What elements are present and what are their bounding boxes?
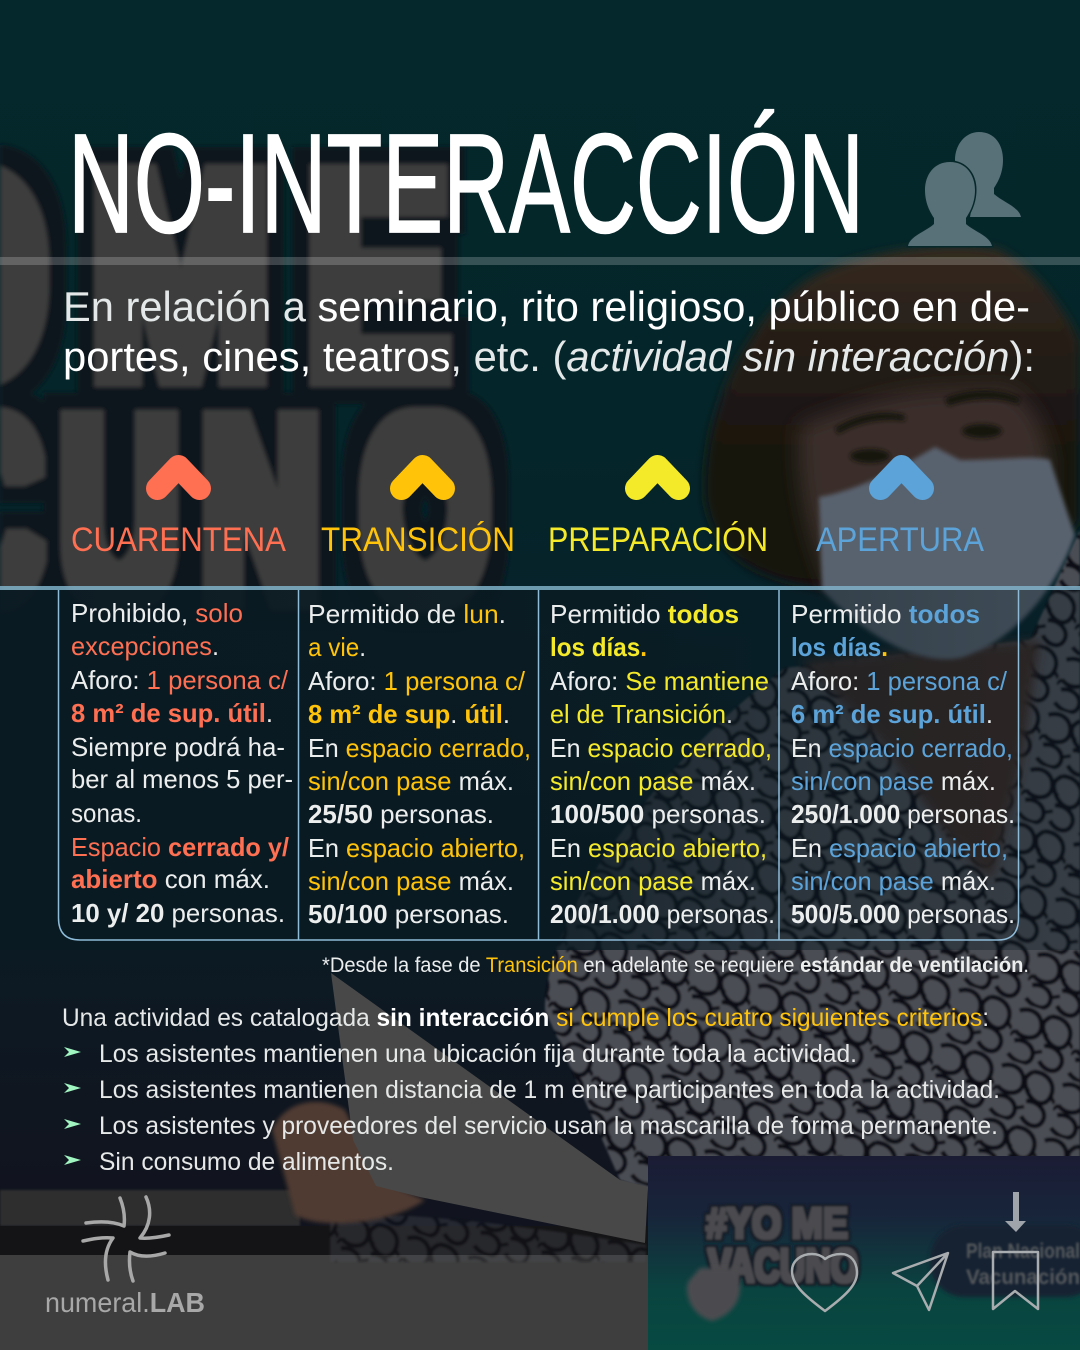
banner lettering: VACUNO bbox=[708, 1240, 858, 1293]
rules text: 6 m² de sup. útil. bbox=[791, 699, 993, 729]
heading: APERTURA bbox=[816, 521, 984, 559]
rules text: excepciones. bbox=[71, 631, 219, 661]
rules text: sin/con pase máx. bbox=[791, 866, 996, 896]
arrow: down bbox=[1005, 1192, 1026, 1232]
rules text bbox=[308, 599, 531, 929]
rules text: Prohibido, solo bbox=[71, 598, 243, 628]
rules text: Aforo: 1 persona c/ bbox=[71, 665, 289, 695]
criteria intro: Una actividad es catalogada sin interacción si cumple los cuatro siguientes criterios: bbox=[62, 1004, 989, 1032]
header rule bbox=[0, 257, 1080, 265]
column: apertura bbox=[791, 466, 1015, 929]
criteria list: Los asistentes mantienen una ubicación fija durante toda la actividad. bbox=[99, 1040, 857, 1068]
logo mark bbox=[83, 1197, 169, 1281]
plan lettering bbox=[966, 1240, 1080, 1289]
rules text: Permitido de lun. bbox=[308, 599, 506, 629]
rules text: 250/1.000 personas. bbox=[791, 799, 1015, 829]
rules text: En espacio cerrado, bbox=[550, 733, 772, 763]
rules text: sin/con pase máx. bbox=[308, 766, 514, 796]
rules text: Permitido todos bbox=[550, 599, 739, 629]
rules text: Aforo: 1 persona c/ bbox=[791, 666, 1008, 696]
heading: PREPARACIÓN bbox=[548, 521, 768, 559]
rules text: En espacio cerrado, bbox=[308, 733, 531, 763]
face mask bbox=[819, 447, 1075, 659]
rules text: 100/500 personas. bbox=[550, 799, 766, 829]
rules text bbox=[550, 599, 775, 929]
rules text: En espacio abierto, bbox=[791, 833, 1008, 863]
icon: send bbox=[893, 1253, 948, 1310]
woman portrait bbox=[545, 246, 1080, 1190]
icon: bookmark bbox=[993, 1252, 1038, 1309]
column: preparación bbox=[548, 466, 775, 929]
rules text: 500/5.000 personas. bbox=[791, 899, 1015, 929]
rules text: ber al menos 5 per- bbox=[71, 764, 293, 794]
rules text: sonas. bbox=[71, 798, 142, 828]
rules text bbox=[791, 599, 1015, 929]
rules text: abierto con máx. bbox=[71, 864, 270, 894]
rules text: En espacio abierto, bbox=[308, 833, 525, 863]
icon: chevron bbox=[158, 466, 200, 488]
plan lettering: Vacunación bbox=[966, 1266, 1080, 1289]
rules text: sin/con pase máx. bbox=[791, 766, 996, 796]
rules text: Espacio cerrado y/ bbox=[71, 832, 289, 862]
eyes bbox=[835, 390, 1020, 463]
rules text: Permitido todos bbox=[791, 599, 980, 629]
table frame bbox=[0, 586, 1080, 940]
bottom scene bbox=[0, 973, 1080, 1350]
rules text: En espacio abierto, bbox=[550, 833, 767, 863]
plan banner blob bbox=[930, 1225, 1080, 1297]
rules text: el de Transición. bbox=[550, 699, 733, 729]
rules text: 25/50 personas. bbox=[308, 799, 494, 829]
rules text: 8 m² de sup. útil. bbox=[308, 699, 510, 729]
icon: heart bbox=[792, 1254, 857, 1311]
subtitle bbox=[63, 283, 1035, 380]
criteria list bbox=[64, 1040, 1000, 1176]
heading: TRANSICIÓN bbox=[321, 521, 515, 559]
banner hand bbox=[687, 1268, 740, 1321]
banner lettering: #YO ME bbox=[706, 1199, 848, 1248]
rules text: En espacio cerrado, bbox=[791, 733, 1013, 763]
rules text: 8 m² de sup. útil. bbox=[71, 698, 273, 728]
rules text: 50/100 personas. bbox=[308, 899, 509, 929]
subtitle: En relación a seminario, rito religioso, público en de- bbox=[63, 283, 1030, 330]
bullet arrow 1 bbox=[64, 1047, 81, 1057]
bullet arrow 4 bbox=[64, 1155, 81, 1165]
criteria list: Los asistentes y proveedores del servicio usan la mascarilla de forma permanente. bbox=[99, 1112, 998, 1140]
icon: chevron bbox=[880, 466, 922, 488]
icon: two people bbox=[908, 132, 1021, 246]
rules text: los días. bbox=[550, 632, 647, 662]
rules text: Aforo: Se mantiene bbox=[550, 666, 769, 696]
rules text: sin/con pase máx. bbox=[308, 866, 514, 896]
rules text: 200/1.000 personas. bbox=[550, 899, 775, 929]
rules text: Aforo: 1 persona c/ bbox=[308, 666, 526, 696]
rules text: Siempre podrá ha- bbox=[71, 732, 285, 762]
panel shade bbox=[0, 590, 1080, 950]
logo: numeral.LAB bbox=[45, 1197, 205, 1318]
rules text bbox=[71, 598, 293, 928]
background sign lettering bbox=[0, 110, 488, 656]
logo wordmark: numeral.LAB bbox=[45, 1287, 205, 1318]
footnote: *Desde la fase de Transición en adelante se requiere estándar de ventilación. bbox=[322, 954, 1029, 977]
subtitle: portes, cines, teatros, etc. (actividad sin interacción): bbox=[63, 333, 1035, 380]
criteria list: Sin consumo de alimentos. bbox=[99, 1148, 394, 1176]
heading: CUARENTENA bbox=[71, 521, 286, 559]
icon: chevron bbox=[402, 466, 444, 488]
column: transición bbox=[308, 466, 531, 929]
rules text: los días. bbox=[791, 632, 888, 662]
icon: chevron bbox=[636, 466, 678, 488]
column: cuarentena bbox=[71, 466, 293, 928]
bullet arrow 2 bbox=[64, 1083, 81, 1093]
criteria list: Los asistentes mantienen distancia de 1 m entre participantes en toda la actividad. bbox=[99, 1076, 1000, 1104]
rules text: a vie. bbox=[308, 632, 366, 662]
rules text: sin/con pase máx. bbox=[550, 866, 756, 896]
bullet arrow 3 bbox=[64, 1119, 81, 1129]
rules text: sin/con pase máx. bbox=[550, 766, 756, 796]
rules text: 10 y/ 20 personas. bbox=[71, 898, 285, 928]
banner lettering bbox=[706, 1199, 858, 1293]
